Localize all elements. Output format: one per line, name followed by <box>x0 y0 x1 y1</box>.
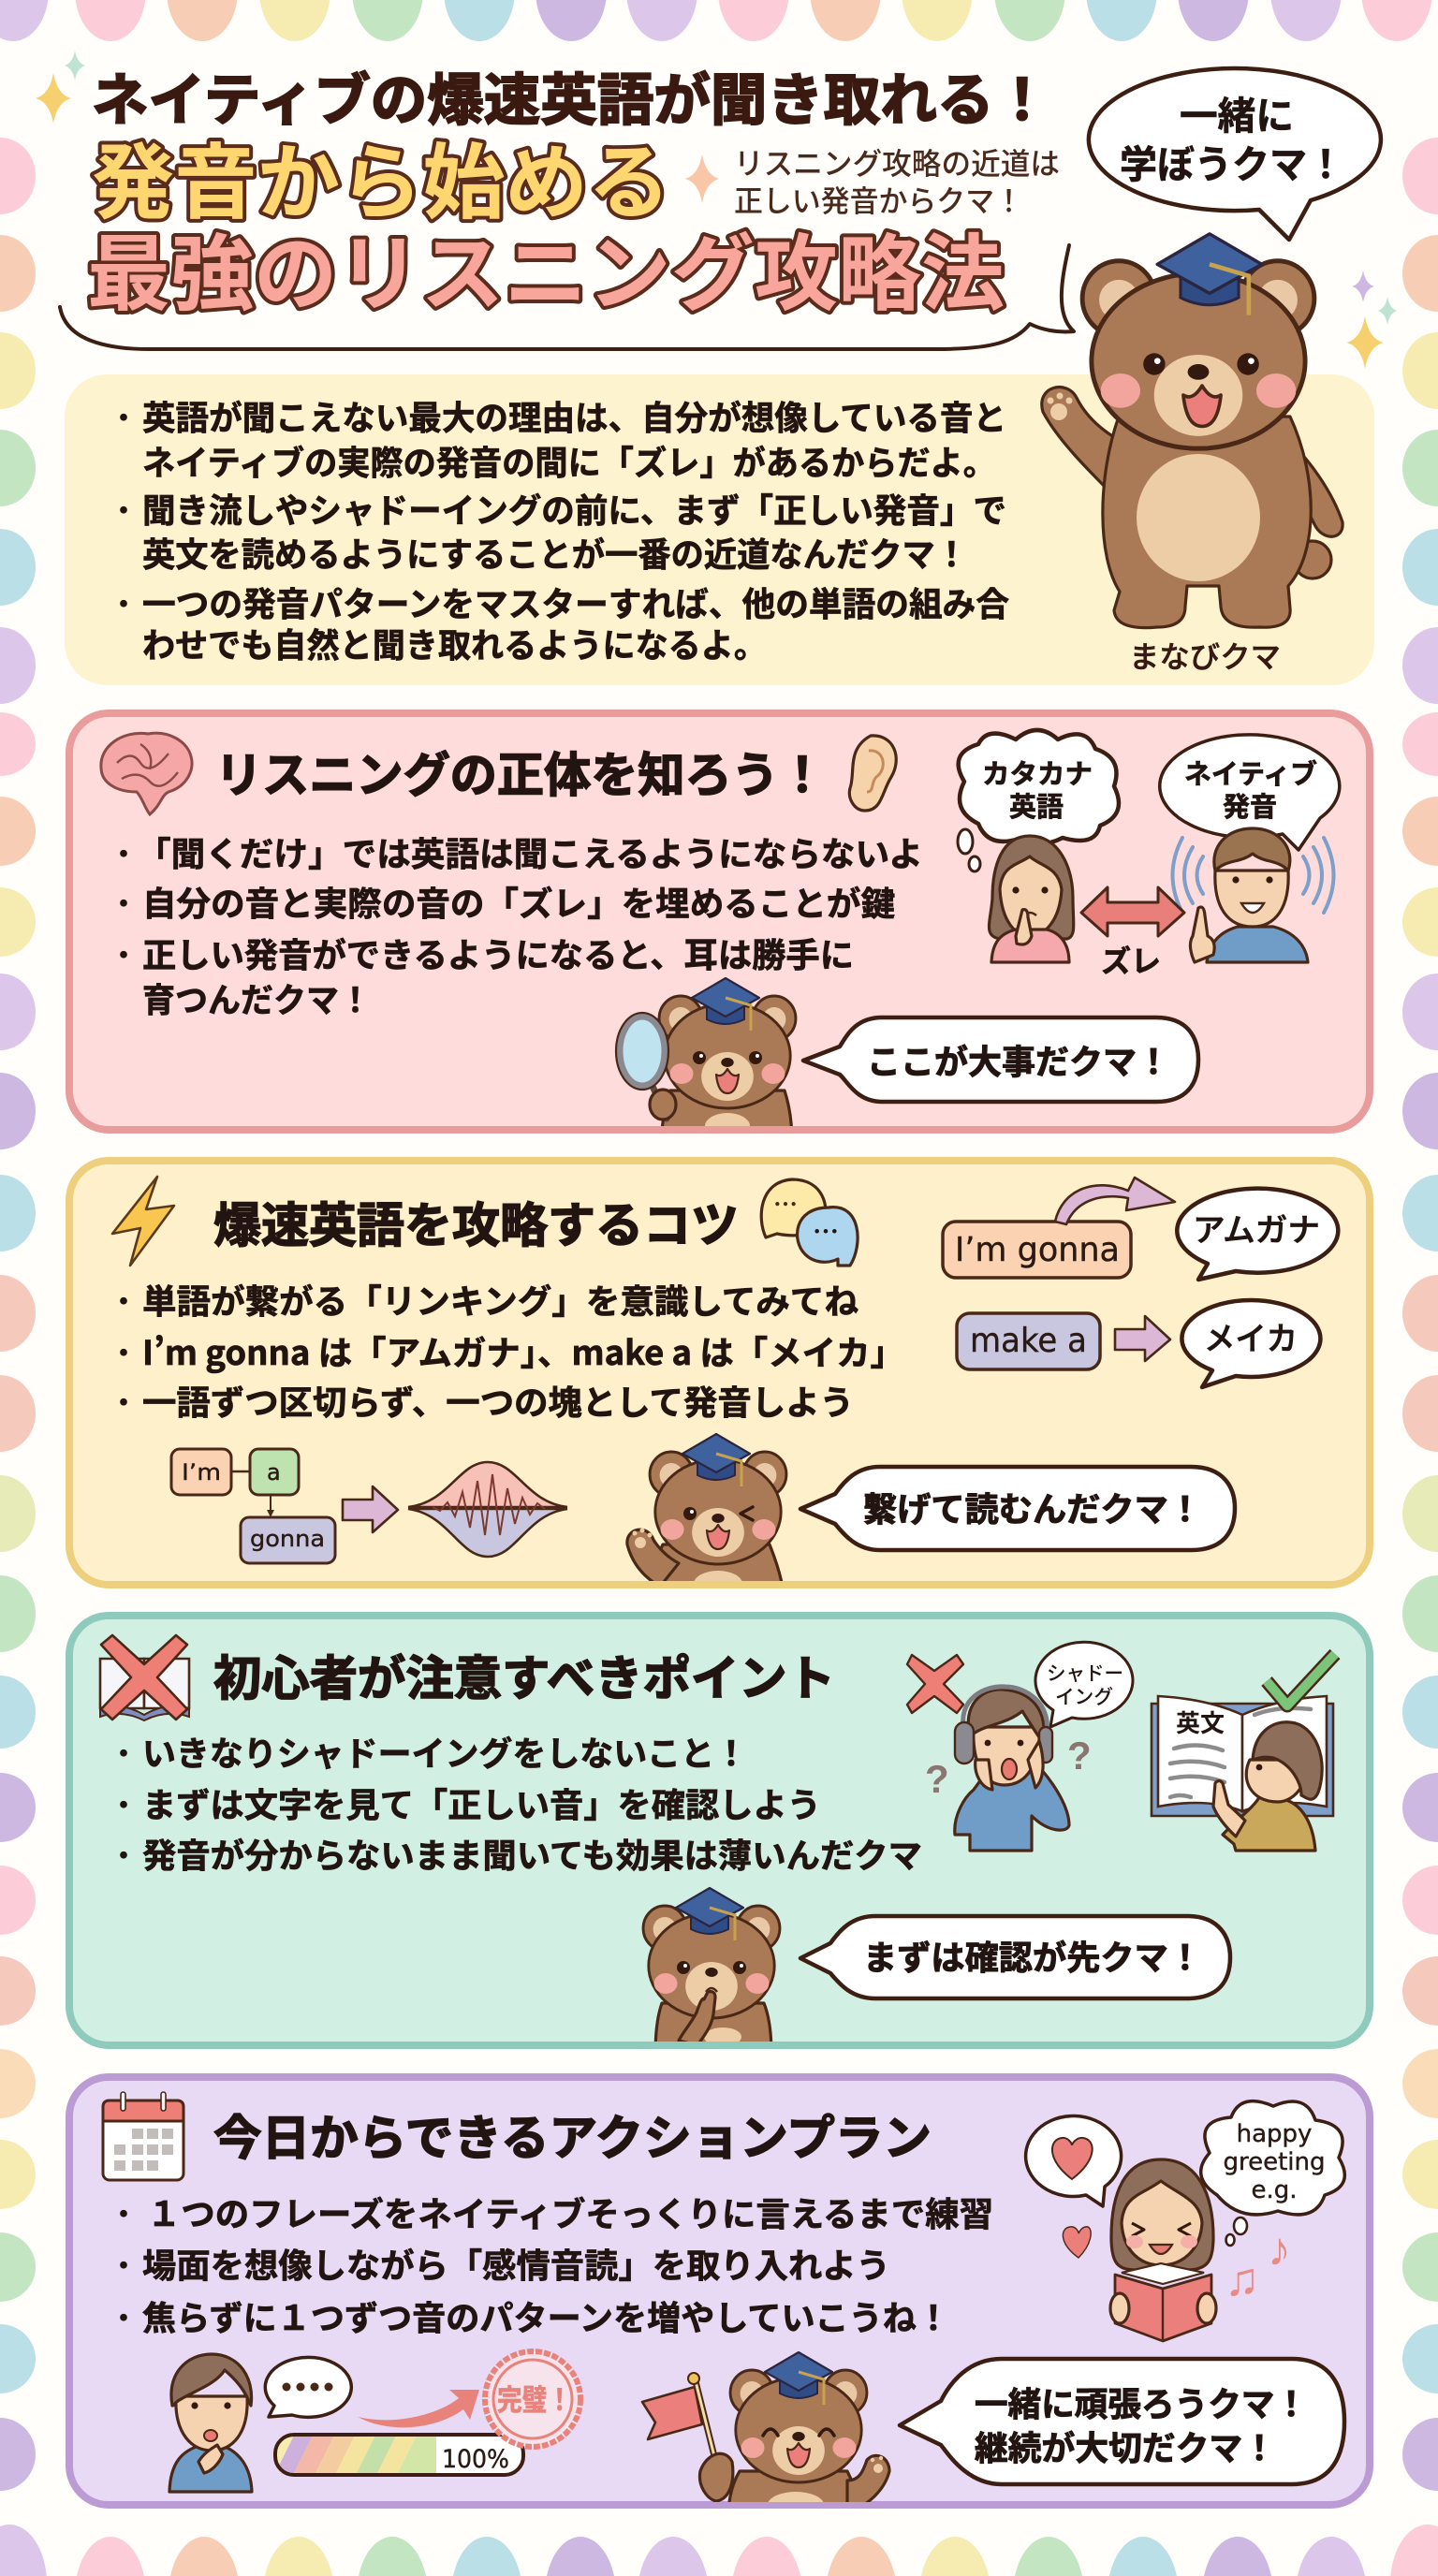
speech bubble: shadowing: イング <box>1055 1682 1113 1710</box>
arrow: swoosh to stamp <box>358 2390 479 2427</box>
bullet list: ・ <box>107 835 140 873</box>
person: woman reading aloud <box>1110 2159 1216 2341</box>
icon: music notes <box>1225 2223 1291 2305</box>
callout: let's keep going: 継続が大切だクマ！ <box>975 2422 1276 2470</box>
title line 1: ネイティブの爆速英語が聞き取れる！ <box>92 55 1050 137</box>
icon: chat bubbles: … <box>813 1212 839 1250</box>
title line 2: 発音から始める <box>92 117 670 236</box>
speech bubble: amugana: アムガナ <box>1193 1205 1320 1251</box>
panel: speed English tips <box>69 1161 1370 1610</box>
icon: calendar <box>103 2092 183 2180</box>
thought cloud: katakana English <box>958 730 1119 871</box>
mascot: bear with flag <box>640 2351 891 2502</box>
bullet list: まずは文字を見て「正しい音」を確認しよう <box>142 1778 821 1827</box>
waveform <box>408 1462 567 1557</box>
title line 3: 最強のリスニング攻略法 <box>87 207 1005 328</box>
example chip: make a: make a <box>970 1322 1087 1360</box>
linking diagram <box>171 1449 335 1563</box>
linking diagram: gonna <box>250 1526 325 1552</box>
bullet list <box>107 1727 922 1878</box>
open book with check <box>1152 1654 1335 1816</box>
icon: book with red X <box>100 1635 189 1720</box>
example chip: make a <box>957 1313 1100 1369</box>
title side note <box>734 140 1060 221</box>
arrow: curved to amugana <box>1055 1178 1175 1224</box>
callout: read linked: 繋げて読むんだクマ！ <box>863 1483 1202 1531</box>
bullet list: 「聞くだけ」では英語は聞こえるようにならないよ <box>137 827 923 876</box>
double arrow: gap <box>1081 887 1184 936</box>
thought cloud: katakana English: 英語 <box>1009 785 1064 825</box>
bullet list: 単語が繋がる「リンキング」を意識してみてね <box>142 1275 858 1324</box>
bullet list: ・ <box>107 936 140 974</box>
bullet list: いきなりシャドーイングをしないこと！ <box>142 1727 748 1776</box>
bullet list: ・ <box>107 1734 140 1773</box>
bullet list: ・ <box>107 1282 140 1321</box>
stamp: perfect: 完璧！ <box>497 2377 572 2419</box>
open book with check: 英文 <box>1176 1705 1225 1739</box>
person: boy thinking <box>169 2354 252 2492</box>
icon: red X <box>907 1655 963 1713</box>
stamp: perfect <box>485 2351 580 2447</box>
bullet list <box>107 1275 904 1425</box>
speech bubble: native pronunciation: ネイティブ <box>1184 753 1317 792</box>
callout: confirm first: まずは確認が先クマ！ <box>863 1931 1202 1980</box>
linking diagram: I’m <box>182 1459 221 1486</box>
bullet list: ・ <box>107 2195 140 2233</box>
intro bullets: 英文を読めるようにすることが一番の近道なんだクマ！ <box>142 528 968 577</box>
bullet list: 焦らずに１つずつ音のパターンを増やしていこうね！ <box>142 2291 950 2340</box>
panel: action plan <box>69 2077 1370 2527</box>
callout: important <box>803 1017 1198 1102</box>
callout: read linked <box>800 1467 1235 1550</box>
thought cloud: happy greeting <box>1201 2101 1344 2246</box>
mascot: bear with magnifier <box>614 977 798 1126</box>
icon: chat bubbles <box>761 1179 858 1266</box>
callout: let's keep going <box>900 2359 1344 2484</box>
bullet list: 自分の音と実際の音の「ズレ」を埋めることが鍵 <box>142 877 895 926</box>
intro bullets: わせでも自然と聞き取れるようになるよ。 <box>142 619 767 667</box>
bullet list: I’m gonna は「アムガナ」、make a は「メイカ」 <box>142 1326 904 1375</box>
title side note: 正しい発音からクマ！ <box>734 178 1023 221</box>
panel heading: 今日からできるアクションプラン <box>213 2100 932 2169</box>
thought cloud: happy greeting: e.g. <box>1251 2176 1298 2204</box>
person: boy confused with headphones <box>925 1687 1092 1851</box>
example chip: I'm gonna: I’m gonna <box>955 1231 1120 1269</box>
icon: small heart <box>1063 2227 1091 2258</box>
arrow: to meika <box>1115 1316 1170 1361</box>
thought cloud: happy greeting: greeting <box>1223 2148 1326 2176</box>
person: boy confused with headphones: ? <box>1067 1734 1092 1778</box>
speech bubble: native pronunciation: 発音 <box>1223 785 1277 825</box>
bullet list: ・ <box>107 1334 140 1372</box>
progress bar: 100% <box>442 2445 509 2474</box>
arrow: to waveform <box>343 1486 398 1532</box>
speech bubble: shadowing <box>1035 1642 1133 1727</box>
bullet list: ・ <box>107 1383 140 1422</box>
panel heading: リスニングの正体を知ろう！ <box>215 737 826 806</box>
bullet list: 正しい発音ができるようになると、耳は勝手に <box>142 929 854 977</box>
callout: confirm first <box>800 1916 1230 1998</box>
mascot name label: まなびクマ <box>1129 634 1281 677</box>
speech bubble: heart <box>1026 2116 1122 2206</box>
callout: let's keep going: 一緒に頑張ろうクマ！ <box>975 2378 1308 2426</box>
speech bubble: meika <box>1181 1300 1320 1387</box>
panel: intro <box>65 374 1374 685</box>
linking diagram: a <box>267 1459 281 1486</box>
icon: brain <box>101 733 192 814</box>
speech bubble: study together: 一緒に <box>1180 84 1294 140</box>
title bubble outline <box>60 245 1074 349</box>
title side note: リスニング攻略の近道は <box>734 140 1060 183</box>
label: zure: ズレ <box>1101 938 1161 981</box>
person: woman thinking <box>989 836 1074 962</box>
callout: important: ここが大事だクマ！ <box>867 1035 1170 1084</box>
bullet list: １つのフレーズをネイティブそっくりに言えるまで練習 <box>147 2188 993 2236</box>
sparkles around the title <box>36 51 1398 369</box>
bullet list: 一語ずつ区切らず、一つの塊として発音しよう <box>142 1376 854 1425</box>
person: boy confused with headphones: ? <box>925 1757 949 1801</box>
bullet list: ・ <box>107 1837 140 1875</box>
intro bullets: ・ <box>107 491 140 530</box>
bullet list: 場面を想像しながら「感情音読」を取り入れよう <box>142 2239 890 2288</box>
bullet list: 育つんだクマ！ <box>142 973 372 1022</box>
speech bubble: study together <box>1089 68 1381 240</box>
icon: ear <box>849 736 896 811</box>
bullet list: 発音が分からないまま聞いても効果は薄いんだクマ <box>142 1829 922 1878</box>
mascot: bear winking <box>625 1432 788 1581</box>
icon: lightning bolt <box>112 1177 174 1266</box>
thought cloud: happy greeting: happy <box>1237 2120 1312 2148</box>
speech bubble: dots <box>265 2357 351 2417</box>
icon: music notes: ♫ <box>1225 2253 1260 2305</box>
progress bar <box>271 2434 523 2481</box>
person: man speaking <box>1172 828 1333 962</box>
intro bullets: ネイティブの実際の発音の間に「ズレ」があるからだよ。 <box>142 436 996 485</box>
bullet list: ・ <box>107 1786 140 1824</box>
panel heading: 爆速英語を攻略するコツ <box>213 1187 739 1256</box>
thought cloud: katakana English: カタカナ <box>982 753 1093 792</box>
bullet list <box>107 827 923 1022</box>
speech bubble: native pronunciation <box>1160 735 1340 850</box>
panel: listening <box>69 713 1370 1151</box>
panel heading: 初心者が注意すべきポイント <box>213 1640 835 1709</box>
speech bubble: study together: 学ぼうクマ！ <box>1120 133 1344 189</box>
example chip: I'm gonna <box>943 1222 1131 1278</box>
intro bullets: 英語が聞こえない最大の理由は、自分が想像している音と <box>142 391 1006 440</box>
icon: chat bubbles: … <box>773 1186 798 1221</box>
person: boy reading <box>1213 1722 1322 1851</box>
bullet list: ・ <box>107 2247 140 2285</box>
speech bubble: amugana <box>1177 1189 1338 1280</box>
intro bullets: ・ <box>107 399 140 437</box>
panel: beginner cautions <box>69 1616 1370 2059</box>
mascot: bear thinking <box>643 1888 780 2059</box>
bullet list: ・ <box>107 2299 140 2337</box>
bullet list <box>107 2188 993 2340</box>
intro bullets: 聞き流しやシャドーイングの前に、まず「正しい発音」で <box>142 484 1006 533</box>
speech bubble: meika: メイカ <box>1204 1313 1298 1359</box>
bullet list: ・ <box>107 885 140 923</box>
intro bullets <box>107 391 1009 667</box>
intro bullets: 一つの発音パターンをマスターすれば、他の単語の組み合 <box>142 578 1009 626</box>
speech bubble: shadowing: シャドー <box>1047 1659 1123 1687</box>
icon: music notes: ♪ <box>1268 2223 1291 2276</box>
intro bullets: ・ <box>107 585 140 623</box>
mascot: big bear waving <box>1042 234 1343 628</box>
